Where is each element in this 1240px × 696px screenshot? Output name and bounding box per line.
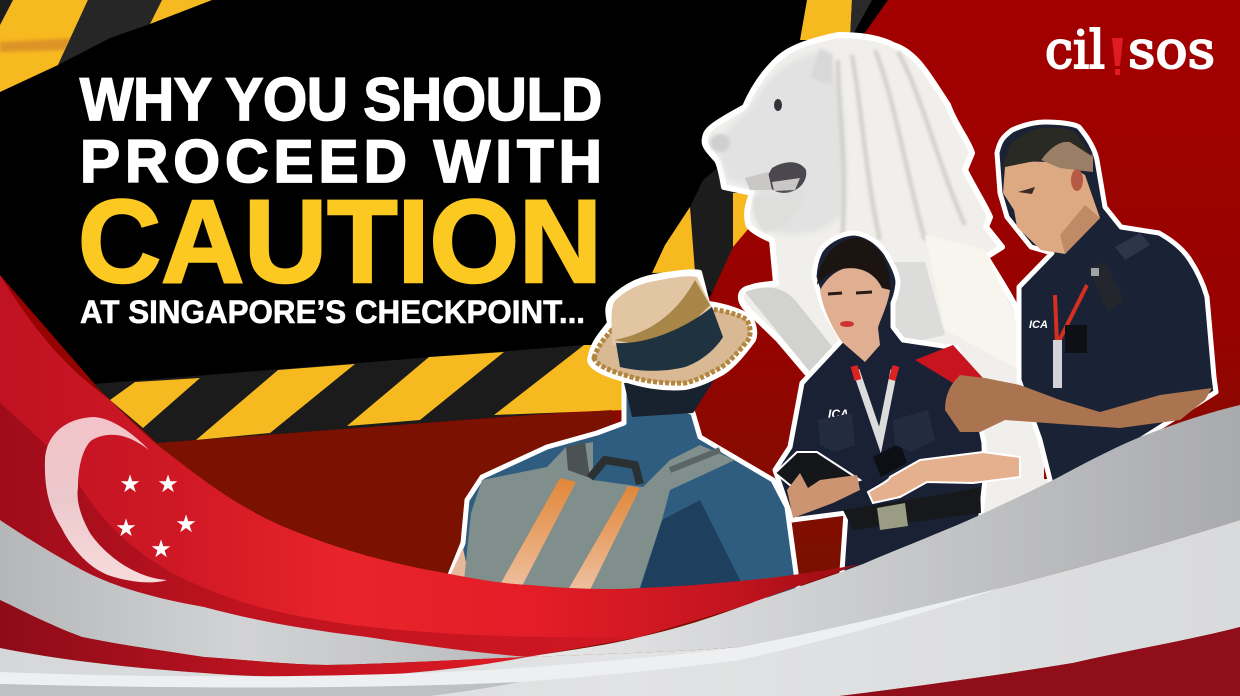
passport wallet: [775, 452, 860, 490]
male ear: [1071, 169, 1083, 191]
female lips: [840, 321, 854, 327]
merlion nose shade: [710, 134, 730, 152]
gap in statue: [1044, 463, 1050, 479]
male neck and face: [1003, 162, 1100, 254]
merlion mane folds: [838, 50, 965, 240]
shirt shadow: [640, 500, 745, 590]
male eye: [1018, 187, 1035, 194]
male shoulder epaulette: [1115, 233, 1150, 260]
title: [78, 66, 602, 330]
wave: darker flag fold: [0, 403, 640, 657]
panel: dark red lower block: [157, 410, 625, 600]
hat brim: [594, 308, 750, 383]
heading line 3: caution: CAUTION: [78, 176, 602, 308]
merlion face shading: [718, 50, 846, 234]
female neck and face: [820, 265, 890, 362]
female hair: [817, 238, 890, 290]
backpack handle: [590, 460, 640, 484]
merlion eye: [774, 99, 782, 111]
body camera: [1088, 262, 1124, 312]
merlion scales: [885, 262, 945, 345]
male lanyard: [1055, 285, 1087, 385]
lanyard: [856, 370, 894, 440]
male chin shadow: [1060, 205, 1100, 254]
merlion teeth: [745, 172, 800, 191]
backpack leather strap left: [497, 478, 576, 590]
wave: dark red bottom right: [840, 627, 1240, 696]
heading line 2: PROCEED WITH: [80, 128, 602, 195]
hat crown shadow: [614, 280, 710, 345]
wave: main red: [0, 275, 860, 657]
id card holder: [873, 443, 907, 477]
hazard stripes: lower band: [94, 345, 625, 443]
backpack leather strap right: [568, 486, 640, 590]
male hair fade: [1041, 142, 1093, 172]
belt buckle: [877, 503, 908, 530]
hat band: [616, 307, 723, 371]
backpack: [463, 442, 735, 590]
left hand: [787, 473, 860, 518]
male radio: [1065, 325, 1087, 353]
officer: female: [775, 233, 1020, 600]
panel: black hazard backdrop: [0, 0, 888, 443]
icon: flag stars: ★: [177, 513, 196, 536]
backpack strap: [670, 450, 720, 470]
right forearm: [868, 452, 1020, 503]
icon: flag stars: [117, 473, 196, 561]
wave: red strip lower left: [0, 600, 527, 677]
heading line 4: AT SINGAPORE’S CHECKPOINT...: [80, 294, 585, 330]
icon: flag stars: ★: [121, 473, 140, 496]
straw hat outline: [589, 271, 755, 388]
belt: [843, 487, 981, 530]
icon: flag stars: ★: [152, 538, 171, 561]
wave: silver right upper: [527, 405, 1240, 657]
heading line 1: WHY YOU SHOULD: [80, 66, 602, 133]
merlion statue: [705, 35, 1057, 530]
hazard stripes: top right: [652, 0, 872, 293]
backpack top flap: [566, 442, 590, 478]
logo: cilisos: sos: [1128, 21, 1215, 81]
merlion paw: [745, 287, 835, 372]
waves: Singapore flag: [0, 275, 1240, 696]
traveller: [448, 271, 800, 600]
logo: cilisos: [1045, 21, 1215, 81]
male name badge: ICA: [1029, 319, 1048, 331]
icon: flag stars: ★: [117, 517, 136, 540]
red passport: [915, 345, 992, 388]
name badge: ICA: [828, 407, 849, 421]
lanyard red tips: [854, 366, 896, 380]
male badge strap: [1053, 340, 1062, 388]
pocket right: [893, 410, 935, 452]
hazard stripes: top left: [0, 0, 212, 92]
merlion mouth: [765, 162, 806, 193]
merlion shade fold: [925, 235, 1020, 370]
traveller shirt: [448, 383, 800, 600]
hat crown: [612, 276, 712, 345]
icon: flag crescent: [45, 417, 167, 582]
pocket: [818, 413, 855, 452]
icon: flag stars: ★: [159, 473, 178, 496]
female eyes: [828, 292, 872, 294]
skin at left arm: [450, 548, 470, 582]
neck shadow: [624, 377, 716, 417]
merlion jaw: [753, 188, 803, 232]
logo: cilisos: cil: [1045, 21, 1105, 81]
wave: silver upper left: [0, 520, 527, 665]
wave: silver bottom band: [0, 520, 1240, 696]
camera highlight: [1091, 268, 1099, 276]
wave: grey base: [0, 682, 520, 696]
wave: white highlight: [0, 588, 1000, 688]
merlion ear: [810, 48, 832, 85]
officer: male: [997, 122, 1216, 500]
male officer arm: [945, 375, 1212, 432]
male hair: [1003, 127, 1093, 167]
